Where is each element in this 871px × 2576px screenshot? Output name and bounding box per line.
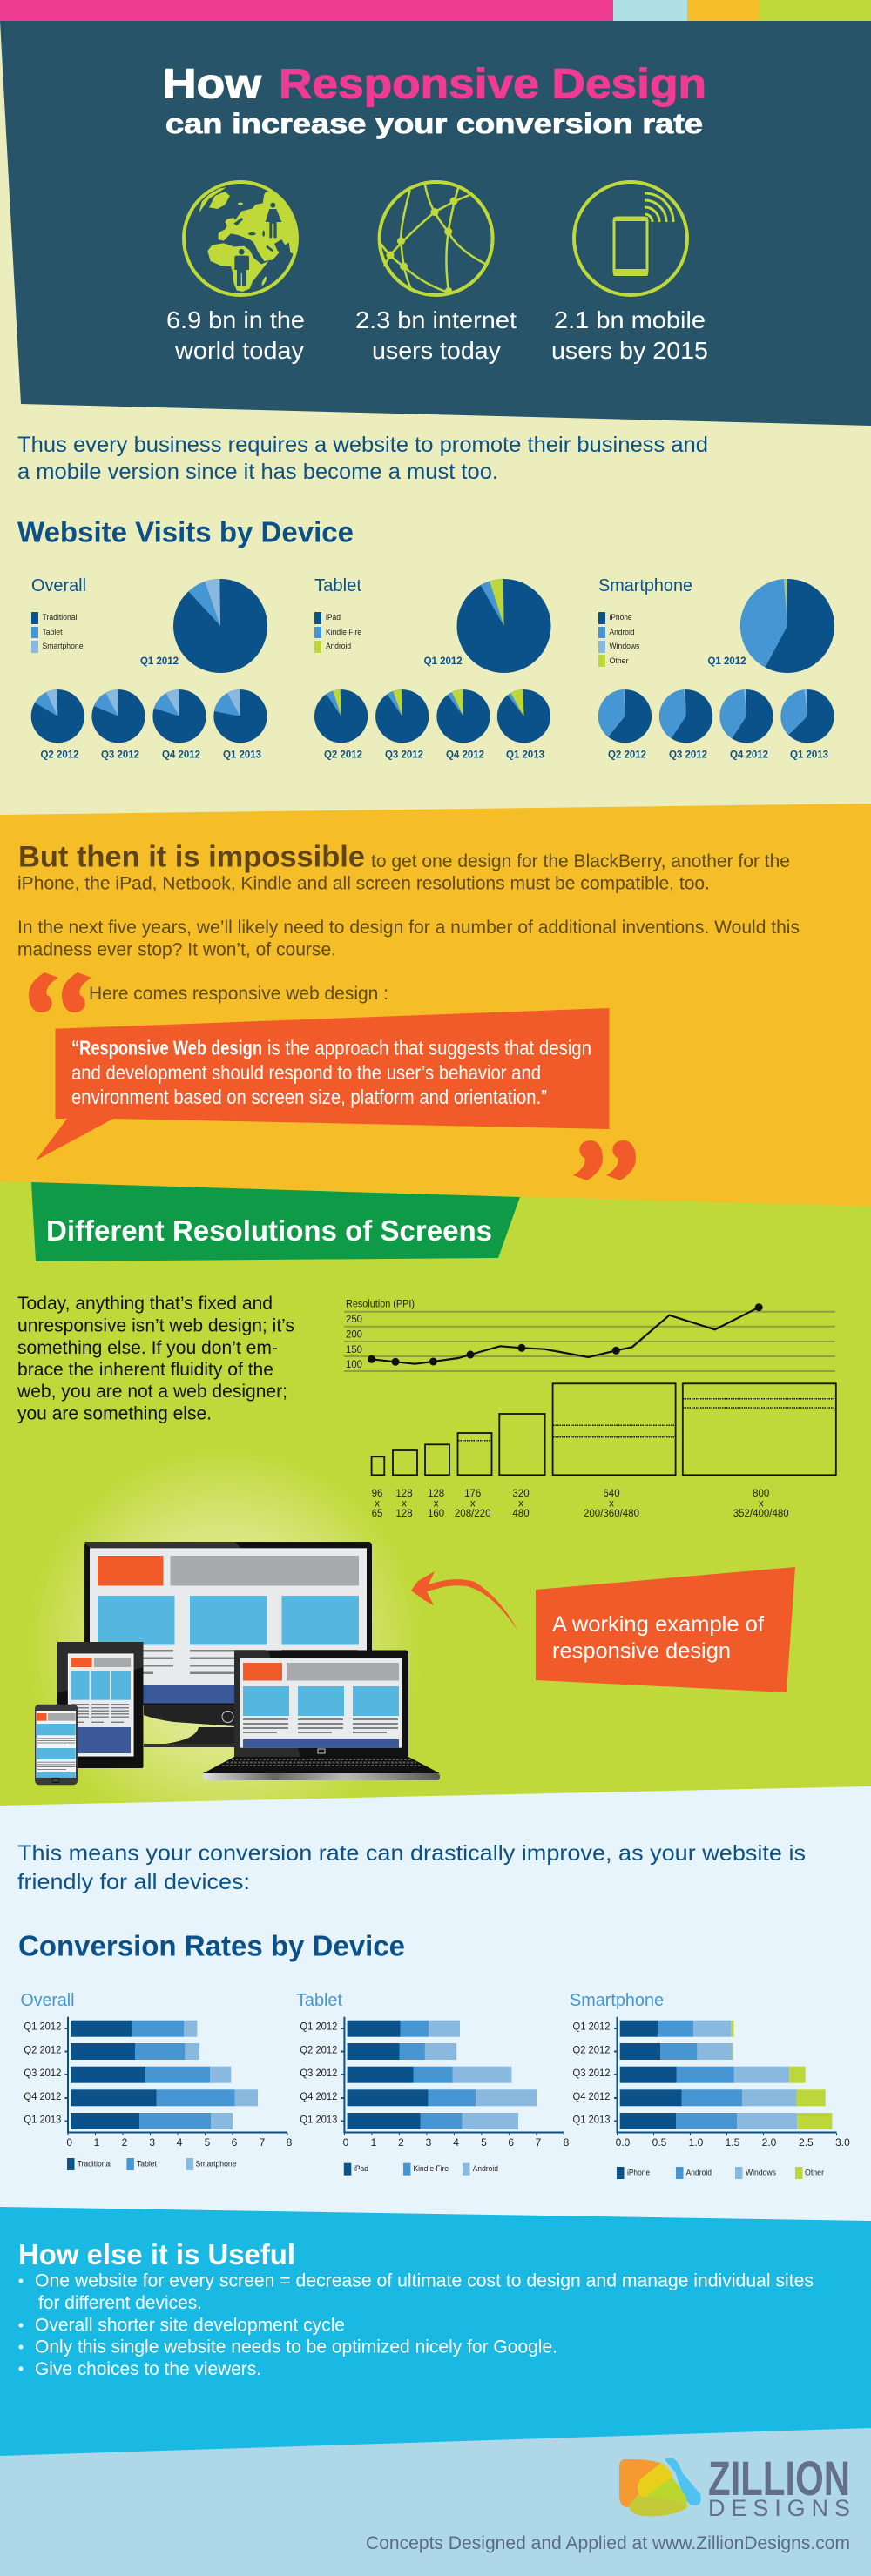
legend: overall: Overall xyxy=(31,576,86,595)
bullet list: One website for every screen = decrease of ultimate cost to design and manage individual sites xyxy=(35,2271,814,2291)
bullet list: Give choices to the viewers. xyxy=(35,2359,261,2379)
chart: tablet conversion bars: Tablet xyxy=(296,1991,342,2010)
panel: orange section xyxy=(0,804,871,1207)
resolution labels: x xyxy=(518,1499,523,1510)
legend: overall bars: Tablet xyxy=(137,2159,157,2168)
legend: smartphone bars xyxy=(617,2167,824,2179)
legend: smartphone xyxy=(598,576,692,667)
text: today anything fixed: Today, anything that’s fixed and xyxy=(17,1294,273,1314)
legend: smartphone bars: iPhone xyxy=(627,2168,650,2176)
chart: overall conversion bars: 5 xyxy=(205,2136,211,2149)
bullet list: Overall shorter site development cycle xyxy=(35,2315,345,2335)
chart: overall conversion bars: 2 xyxy=(122,2136,128,2149)
callout: definition speech bubble: environment based on screen size, platform and orientation.” xyxy=(71,1086,547,1108)
intro text: a mobile version since it has become a must too. xyxy=(17,460,498,484)
chart: tablet conversion bars: 0 xyxy=(343,2136,349,2149)
quarter labels: tablet: Q3 2012 xyxy=(385,750,423,761)
stat: world population: world today xyxy=(174,337,304,364)
arrow: pointing at monitor xyxy=(411,1571,518,1631)
pie: tablet Q2 2012 xyxy=(314,689,368,743)
quarter labels: smartphone: Q1 2013 xyxy=(790,750,828,761)
legend: overall xyxy=(31,576,86,653)
icon: closing quote xyxy=(573,1140,636,1180)
resolution labels: 128 xyxy=(428,1489,444,1499)
chart: smartphone conversion bars: 1.5 xyxy=(726,2136,740,2149)
legend: overall bars xyxy=(67,2158,237,2170)
heading: conversion rates: Conversion Rates by Device xyxy=(18,1930,405,1962)
text: today anything fixed: web, you are not a web designer; xyxy=(17,1382,287,1402)
legend: tablet bars: Android xyxy=(473,2164,498,2173)
chart: smartphone conversion bars: Q1 2013 xyxy=(573,2114,611,2126)
chart: smartphone conversion bars: Smartphone xyxy=(570,1991,664,2010)
chart: overall conversion bars: Q1 2012 xyxy=(24,2021,62,2033)
chart: tablet conversion bars: 5 xyxy=(481,2136,487,2149)
text: today anything fixed: something else. If you don’t em- xyxy=(17,1338,278,1358)
chart: overall conversion bars: 1 xyxy=(94,2136,100,2149)
legend: smartphone bars: Android xyxy=(686,2168,712,2176)
chart: smartphone conversion bars: Q3 2012 xyxy=(573,2067,611,2079)
text: but then it is impossible xyxy=(17,841,800,960)
resolution labels: 128 xyxy=(395,1509,413,1519)
text: but then it is impossible: But then it is impossible xyxy=(18,841,365,874)
chart: resolution line: 200 xyxy=(346,1330,362,1341)
chart: overall conversion bars: Q4 2012 xyxy=(24,2090,62,2102)
resolution labels: 160 xyxy=(428,1509,444,1519)
icon: opening quote xyxy=(29,972,91,1012)
icon: desktop monitor xyxy=(84,1542,372,1747)
glow behind devices xyxy=(26,1447,423,1844)
icon: network globe xyxy=(379,182,493,295)
chart: tablet conversion bars: Q3 2012 xyxy=(300,2067,338,2079)
legend: smartphone: iPhone xyxy=(610,613,632,622)
title: Responsive Design xyxy=(279,61,706,108)
quarter labels: tablet: Q2 2012 xyxy=(324,750,362,761)
legend: tablet bars: Kindle Fire xyxy=(413,2164,449,2173)
panel: hero xyxy=(0,21,871,426)
panel: tablet pies xyxy=(314,576,550,761)
legend: smartphone bars: Other xyxy=(805,2168,824,2176)
icon: tablet device xyxy=(57,1642,143,1768)
resolution labels: x xyxy=(402,1499,407,1510)
chart: smartphone conversion bars: 2.5 xyxy=(799,2136,814,2149)
chart: resolution line: 250 xyxy=(346,1315,362,1325)
quarter labels: tablet: Q1 2013 xyxy=(506,750,544,761)
resolution labels: x xyxy=(375,1499,380,1510)
icon: mobile phone with signal xyxy=(574,182,687,295)
resolution labels: x xyxy=(609,1499,614,1510)
panel: smartphone pies: Q1 2012 xyxy=(707,656,746,667)
legend: smartphone: Smartphone xyxy=(598,576,692,595)
panel: how else it is useful xyxy=(0,2207,871,2456)
pie: tablet Q4 2012 xyxy=(436,689,490,743)
callout: definition speech bubble: “Responsive Web design xyxy=(71,1037,262,1059)
text: conversion intro: This means your conversion rate can drastically improve, as your website is xyxy=(17,1841,806,1866)
chart: overall conversion bars: 6 xyxy=(232,2136,238,2149)
heading: how else: How else it is Useful xyxy=(18,2238,295,2270)
stat: world population xyxy=(166,306,305,364)
pie: tablet Q1 2013 xyxy=(497,689,550,743)
chart: overall conversion bars: Q2 2012 xyxy=(24,2043,62,2055)
icon: globe with people xyxy=(184,182,299,295)
pie: smartphone Q1 2013 xyxy=(780,689,834,743)
callout: working example: A working example of xyxy=(552,1612,764,1637)
chart: tablet conversion bars: 1 xyxy=(371,2136,377,2149)
chart: smartphone conversion bars: 3.0 xyxy=(835,2136,850,2149)
legend: smartphone bars: Windows xyxy=(746,2168,776,2176)
callout: definition speech bubble xyxy=(36,1008,610,1160)
quarter labels: smartphone: Q3 2012 xyxy=(669,750,707,761)
background: top section xyxy=(0,0,871,836)
title: can increase your conversion rate xyxy=(165,108,703,139)
text: here comes: Here comes responsive web design : xyxy=(89,984,388,1004)
chart: overall conversion bars: 3 xyxy=(149,2136,155,2149)
text: today anything fixed: brace the inherent fluidity of the xyxy=(17,1360,273,1380)
top colour bar xyxy=(0,0,871,21)
resolution labels: x xyxy=(434,1499,439,1510)
title: How xyxy=(163,61,262,108)
panel: tablet pies: Q1 2012 xyxy=(424,656,463,667)
icon: laptop xyxy=(203,1651,440,1780)
legend: tablet: Kindle Fire xyxy=(326,628,361,636)
legend: overall: Smartphone xyxy=(42,642,84,650)
pie: overall Q1 2012 xyxy=(173,579,267,673)
pie: overall Q1 2013 xyxy=(213,689,267,743)
resolution labels: 65 xyxy=(372,1509,382,1519)
chart: screen size rectangles xyxy=(372,1383,836,1519)
stat: mobile users xyxy=(551,306,708,364)
resolution labels: 640 xyxy=(603,1489,620,1499)
chart: tablet conversion bars xyxy=(296,1991,570,2176)
chart: overall conversion bars: 4 xyxy=(177,2136,183,2149)
chart: smartphone conversion bars: 0.0 xyxy=(616,2136,631,2149)
resolution labels: 352/400/480 xyxy=(733,1509,789,1519)
panel: overall pies xyxy=(31,576,267,761)
stat: world population: 6.9 bn in the xyxy=(166,306,305,333)
legend: tablet: Tablet xyxy=(314,576,361,595)
quarter labels: overall: Q2 2012 xyxy=(40,750,78,761)
chart: tablet conversion bars: Q4 2012 xyxy=(300,2090,338,2102)
pie: smartphone Q3 2012 xyxy=(659,689,712,743)
pie: smartphone Q1 2012 xyxy=(740,579,834,673)
text: but then it is impossible: madness ever stop? It won’t, of course. xyxy=(17,940,336,960)
chart: smartphone conversion bars: 1.0 xyxy=(689,2136,704,2149)
legend: overall bars: Traditional xyxy=(78,2159,111,2168)
chart: overall conversion bars: 0 xyxy=(66,2136,72,2149)
intro text: Thus every business requires a website to promote their business and xyxy=(17,433,708,457)
panel: green section background xyxy=(0,1167,871,1806)
resolution labels xyxy=(372,1489,789,1519)
intro text xyxy=(17,433,708,484)
quarter labels: overall: Q1 2013 xyxy=(223,750,261,761)
resolution labels: 96 xyxy=(372,1489,382,1499)
resolution labels: 208/220 xyxy=(455,1509,490,1519)
chart: overall conversion bars xyxy=(21,1991,293,2170)
chart: overall conversion bars: 7 xyxy=(260,2136,266,2149)
chart: overall conversion bars: Q1 2013 xyxy=(24,2114,62,2126)
legend: tablet bars xyxy=(344,2163,498,2176)
pie: overall Q4 2012 xyxy=(152,689,206,743)
bullet list xyxy=(19,2271,814,2379)
heading banner: different resolutions: Different Resolutions of Screens xyxy=(46,1214,492,1247)
text: but then it is impossible: iPhone, the iPad, Netbook, Kindle and all screen resolutions must be compatible, too. xyxy=(17,874,710,894)
quarter labels: smartphone: Q2 2012 xyxy=(608,750,646,761)
quarter labels: overall xyxy=(40,750,261,761)
stat: internet users: 2.3 bn internet xyxy=(355,306,517,333)
quarter labels: smartphone: Q4 2012 xyxy=(730,750,768,761)
pie: smartphone Q2 2012 xyxy=(598,689,652,743)
chart: smartphone conversion bars xyxy=(570,1991,850,2179)
chart: tablet conversion bars: 3 xyxy=(426,2136,432,2149)
logo: zillion designs: DESIGNS xyxy=(708,2495,850,2521)
chart: smartphone conversion bars: Q1 2012 xyxy=(573,2021,611,2033)
quarter labels: smartphone xyxy=(608,750,828,761)
stat: internet users: users today xyxy=(372,337,501,364)
chart: resolution line: Resolution (PPI) xyxy=(346,1300,415,1310)
legend: overall bars: Smartphone xyxy=(195,2159,237,2168)
chart: resolution line: 150 xyxy=(346,1345,362,1355)
stat: internet users xyxy=(355,306,517,364)
quarter labels: overall: Q3 2012 xyxy=(101,750,139,761)
icon: smartphone device xyxy=(35,1705,78,1785)
chart: tablet conversion bars: 4 xyxy=(453,2136,459,2149)
chart: tablet conversion bars: 6 xyxy=(508,2136,514,2149)
chart: tablet conversion bars: Q2 2012 xyxy=(300,2043,338,2055)
chart: smartphone conversion bars: 0.5 xyxy=(652,2136,667,2149)
resolution labels: x xyxy=(759,1499,764,1510)
quarter labels: tablet: Q4 2012 xyxy=(446,750,484,761)
footer credit: Concepts Designed and Applied at www.ZillionDesigns.com xyxy=(366,2533,850,2553)
text: today anything fixed: you are something else. xyxy=(17,1404,212,1424)
quarter labels: overall: Q4 2012 xyxy=(162,750,200,761)
legend: tablet: Android xyxy=(326,642,351,650)
title xyxy=(163,61,706,139)
text: but then it is impossible: to get one design for the BlackBerry, another for the xyxy=(371,851,790,871)
resolution labels: 320 xyxy=(512,1489,530,1499)
callout: definition speech bubble: is the approach that suggests that design xyxy=(267,1037,591,1059)
legend: smartphone: Other xyxy=(610,656,629,665)
stat: mobile users: 2.1 bn mobile xyxy=(554,306,706,333)
chart: tablet conversion bars: 2 xyxy=(398,2136,404,2149)
heading banner: different resolutions xyxy=(31,1182,520,1261)
callout: working example: responsive design xyxy=(552,1638,731,1663)
chart: smartphone conversion bars: 2.0 xyxy=(762,2136,777,2149)
resolution labels: 128 xyxy=(395,1489,413,1499)
pie: tablet Q3 2012 xyxy=(375,689,429,743)
resolution labels: 480 xyxy=(512,1509,530,1519)
logo: zillion designs xyxy=(619,2451,850,2521)
resolution labels: 176 xyxy=(464,1489,481,1499)
chart: tablet conversion bars: Q1 2012 xyxy=(300,2021,338,2033)
resolution labels: x xyxy=(470,1499,476,1510)
chart: smartphone conversion bars: Q4 2012 xyxy=(573,2090,611,2102)
callout: definition speech bubble: and development should respond to the user’s behavior and xyxy=(71,1061,541,1084)
legend: tablet xyxy=(314,576,361,653)
chart: resolution line: 100 xyxy=(346,1360,362,1370)
chart: overall conversion bars: Q3 2012 xyxy=(24,2067,62,2079)
bullet list: Only this single website needs to be optimized nicely for Google. xyxy=(35,2337,557,2357)
legend: tablet bars: iPad xyxy=(354,2164,368,2173)
legend: smartphone: Android xyxy=(610,628,634,636)
resolution labels: 200/360/480 xyxy=(584,1509,639,1519)
pie: overall Q3 2012 xyxy=(91,689,145,743)
legend: overall: Traditional xyxy=(42,613,77,622)
legend: overall: Tablet xyxy=(42,628,63,636)
chart: tablet conversion bars: 8 xyxy=(564,2136,570,2149)
chart: tablet conversion bars: 7 xyxy=(536,2136,542,2149)
chart: tablet conversion bars: Q1 2013 xyxy=(300,2114,338,2126)
pie: smartphone Q4 2012 xyxy=(719,689,773,743)
text: today anything fixed xyxy=(17,1294,294,1424)
legend: tablet: iPad xyxy=(326,613,341,622)
text: today anything fixed: unresponsive isn’t web design; it’s xyxy=(17,1315,294,1335)
text: but then it is impossible: In the next five years, we’ll likely need to design for a number of additional inventions. Would this xyxy=(17,918,800,938)
legend: smartphone: Windows xyxy=(610,642,640,650)
pie: tablet Q1 2012 xyxy=(456,579,550,673)
quarter labels: tablet xyxy=(324,750,544,761)
panel: smartphone pies xyxy=(598,576,834,761)
resolution labels: 800 xyxy=(753,1489,769,1499)
panel: light blue section background xyxy=(0,1786,871,2229)
panel: overall pies: Q1 2012 xyxy=(140,656,179,667)
chart: overall conversion bars: Overall xyxy=(21,1991,75,2010)
stat: mobile users: users by 2015 xyxy=(551,337,708,364)
pie: overall Q2 2012 xyxy=(31,689,84,743)
heading: website visits: Website Visits by Device xyxy=(17,516,354,549)
chart: smartphone conversion bars: Q2 2012 xyxy=(573,2043,611,2055)
callout: working example xyxy=(536,1567,795,1692)
footer background xyxy=(0,2403,871,2576)
bullet list: for different devices. xyxy=(38,2293,202,2313)
text: conversion intro: friendly for all devices: xyxy=(17,1870,250,1894)
chart: overall conversion bars: 8 xyxy=(287,2136,293,2149)
chart: resolution line xyxy=(344,1300,835,1371)
text: conversion intro xyxy=(17,1841,806,1894)
